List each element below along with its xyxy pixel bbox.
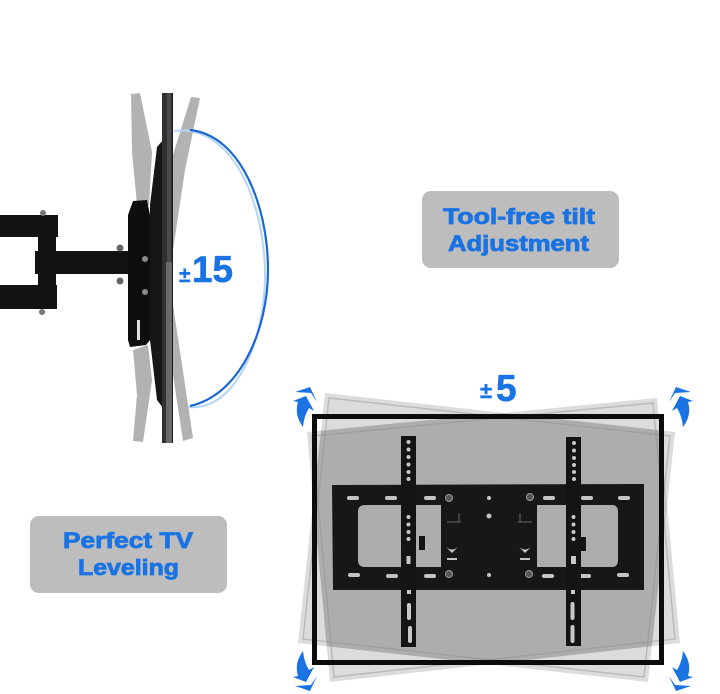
leveling angle label (480, 368, 517, 409)
right vertical rail (566, 437, 586, 646)
icon: arrow bottom-left (293, 651, 317, 691)
leveling angle label: 5 (496, 368, 517, 409)
wall plate (332, 484, 644, 590)
ghost TV rotated counter-clockwise (307, 398, 680, 682)
callout: perfect TV leveling (30, 516, 227, 593)
articulated arm (0, 210, 129, 315)
left vertical rail (401, 436, 425, 647)
callout: tool-free tilt (422, 191, 619, 268)
central TV frame (314, 416, 662, 663)
ghost TV tilted back, top part (131, 93, 152, 205)
tilt angle label: 15 (192, 249, 233, 290)
tilt angle label: ± (179, 264, 191, 287)
callout: perfect TV leveling: Perfect TV (63, 528, 193, 553)
icon: arrow top-right (669, 387, 693, 427)
TV side profile (162, 93, 173, 443)
callout: perfect TV leveling: Leveling (78, 555, 179, 580)
TV back shell (150, 140, 163, 408)
front view: rotating TV with mount (298, 393, 680, 682)
side view: tilting TV on arm (0, 93, 268, 443)
ghost TV rotated clockwise (298, 393, 675, 682)
ghost TV tilted forward, top part (173, 97, 200, 250)
leveling angle label: ± (480, 378, 492, 403)
wall plate bracket (128, 200, 150, 347)
callout: tool-free tilt: Adjustment (448, 231, 590, 256)
icon: arrow top-left (293, 387, 317, 427)
ghost TV tilted forward, bottom part (133, 345, 152, 442)
rotation arc (174, 130, 268, 407)
callout: tool-free tilt: Tool-free tilt (443, 204, 596, 229)
ghost TV tilted back, bottom part (173, 305, 193, 441)
icon: arrow bottom-right (669, 651, 693, 691)
